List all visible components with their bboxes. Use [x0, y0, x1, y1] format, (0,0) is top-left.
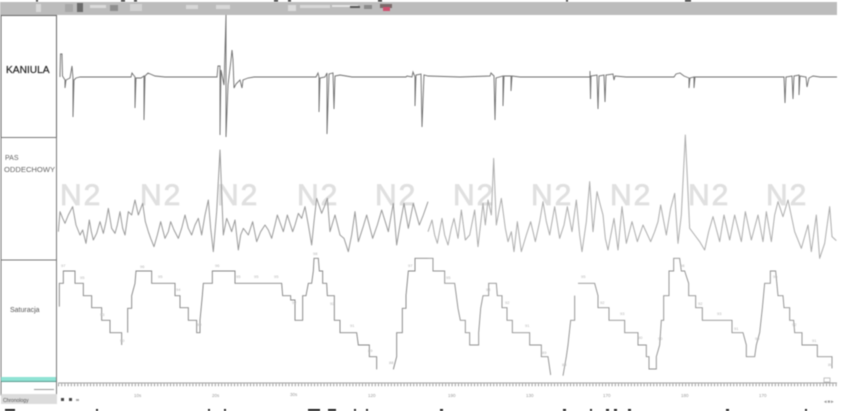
saturation value labels: 91 [812, 338, 817, 343]
saturation value labels: 91 [525, 323, 530, 328]
chart: saturation trace, right half [428, 258, 832, 376]
time axis tick labels: 20s [212, 393, 220, 398]
control: scale selector [1, 389, 79, 404]
cropped text line below the chart [5, 409, 807, 411]
control: scale selector: Chronology [3, 398, 29, 404]
saturation value labels: 89 [368, 348, 373, 353]
saturation value labels: 88 [562, 362, 567, 367]
saturation value labels: 97 [408, 263, 413, 268]
saturation value labels: 96 [140, 264, 145, 269]
chart: respiratory belt trace [58, 150, 428, 252]
saturation value labels: 90 [658, 336, 663, 341]
time axis tick labels: 170 [603, 393, 611, 398]
saturation value labels: 96 [215, 263, 220, 268]
saturation value labels: 92 [600, 300, 605, 305]
saturation value labels: 96 [773, 274, 778, 279]
saturation value labels: 91 [734, 326, 739, 331]
saturation value labels: 95 [158, 274, 163, 279]
saturation value labels: 98 [313, 251, 318, 256]
saturation value labels: 92 [330, 301, 335, 306]
toolbar [0, 2, 837, 15]
saturation value labels: 88 [828, 362, 833, 367]
watermark labels: N2 sleep stage: N2 [531, 179, 573, 212]
saturation value labels: 92 [505, 300, 510, 305]
watermark labels: N2 sleep stage: N2 [375, 179, 417, 212]
time axis tick labels: 120 [368, 393, 376, 398]
saturation value labels: 98 [680, 263, 685, 268]
label: PAS ODDECHOWY: PAS [5, 155, 19, 162]
time axis tick labels: 170 [759, 393, 767, 398]
time axis tick labels: 190 [448, 393, 456, 398]
time axis [58, 378, 837, 385]
label: Saturacja: Saturacja [10, 307, 40, 314]
saturation value labels: 95 [446, 275, 451, 280]
watermark labels: N2 sleep stage: N2 [297, 179, 339, 212]
saturation value labels: 95 [236, 274, 241, 279]
time axis tick labels: 10s [134, 393, 142, 398]
saturation value labels: 90 [197, 322, 202, 327]
saturation value labels: 95 [581, 274, 586, 279]
saturation value labels: 91 [350, 323, 355, 328]
watermark labels: N2 sleep stage: N2 [766, 179, 808, 212]
panel: channel labels column [1, 16, 56, 395]
saturation value labels [61, 251, 833, 367]
saturation value labels: 92 [292, 300, 297, 305]
watermark labels: N2 sleep stage [60, 179, 808, 212]
time axis tick labels: 180 [681, 393, 689, 398]
label: KANIULA: KANIULA [6, 65, 50, 76]
saturation value labels: 93 [717, 311, 722, 316]
saturation value labels: 88 [389, 360, 394, 365]
watermark labels: N2 sleep stage: N2 [217, 179, 259, 212]
watermark labels: N2 sleep stage: N2 [453, 179, 495, 212]
watermark labels: N2 sleep stage: N2 [610, 179, 652, 212]
saturation value labels: 93 [100, 312, 105, 317]
saturation value labels: 92 [698, 301, 703, 306]
chart: saturation trace [59, 258, 428, 369]
time axis tick labels: ◄■► [823, 399, 835, 404]
saturation value labels: 93 [620, 311, 625, 316]
time axis tick labels: 130 [526, 393, 534, 398]
watermark labels: N2 sleep stage: N2 [688, 179, 730, 212]
saturation value labels: 95 [80, 275, 85, 280]
cropped text line above the toolbar [36, 0, 691, 2]
saturation value labels: 94 [176, 287, 181, 292]
saturation value labels: 92 [792, 322, 797, 327]
saturation value labels: 94 [486, 287, 491, 292]
chart: KANIULA airflow trace [60, 15, 837, 137]
saturation value labels: 97 [61, 263, 66, 268]
saturation value labels: 90 [755, 336, 760, 341]
chart: respiratory belt trace, right half [428, 135, 836, 258]
watermark labels: N2 sleep stage: N2 [140, 179, 182, 212]
time axis tick labels [134, 392, 835, 404]
label: PAS ODDECHOWY: ODDECHOWY [4, 165, 55, 174]
saturation value labels: 95 [254, 274, 259, 279]
saturation value labels: 90 [120, 338, 125, 343]
time axis tick labels: 30s [290, 392, 298, 397]
saturation value labels: 95 [274, 274, 279, 279]
saturation value labels: 90 [638, 335, 643, 340]
watermark labels: N2 sleep stage: N2 [60, 179, 102, 212]
saturation value labels: 89 [542, 350, 547, 355]
